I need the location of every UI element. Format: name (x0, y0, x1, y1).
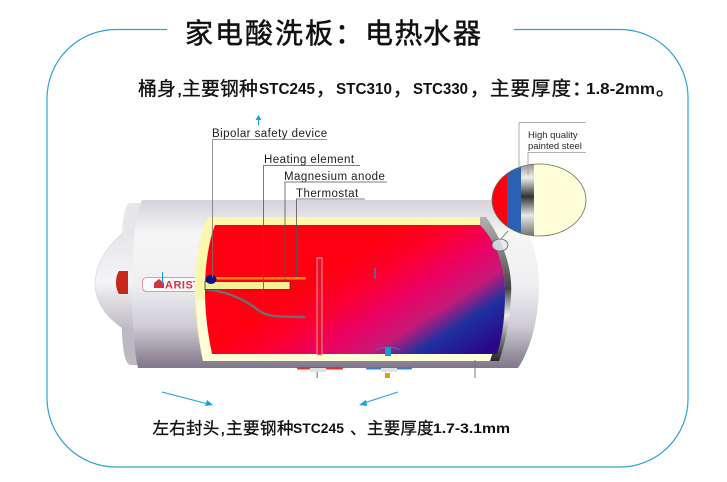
label: Thermostat (296, 188, 365, 277)
label: Magnesium anode (284, 171, 387, 282)
heater magnesium anode (205, 282, 290, 290)
heater dome end cap (95, 234, 122, 328)
caption: end heads: 1.7-3.1mm (433, 420, 510, 436)
heater heating element (205, 289, 305, 317)
title: 家电酸洗板：电热水器 (185, 18, 481, 49)
label: Bipolar safety device (212, 128, 328, 278)
label: Heating element (264, 154, 360, 312)
heater flange (121, 203, 140, 365)
caption: end heads (152, 419, 510, 438)
magnifier: steel layers (490, 160, 590, 251)
label: Heating element: Heating element (264, 154, 355, 166)
heater logo: ARIST (165, 280, 200, 292)
heater logo (142, 278, 200, 292)
heater safety device (206, 275, 216, 284)
caption: end heads: 、 (350, 420, 366, 438)
subtitle: barrel body (138, 78, 675, 100)
heater thermostat rod (211, 277, 306, 280)
caption: end heads: 左右封头,主要钢种 (152, 419, 294, 438)
caption: end heads: STC245 (293, 420, 344, 436)
water heater illustration (95, 200, 539, 378)
subtitle: barrel body: ， (316, 78, 335, 99)
subtitle: barrel body: STC330 (413, 81, 468, 98)
heater thermostat tube (317, 258, 322, 355)
subtitle: barrel body: ， (393, 78, 412, 99)
label: High quality painted steel: painted steel (528, 141, 582, 152)
small blue tick marks (162, 268, 375, 283)
arrow: to right head (359, 392, 398, 406)
subtitle: barrel body: 桶身,主要钢种 (138, 78, 258, 99)
subtitle: barrel body: STC310 (336, 81, 392, 98)
label: Magnesium anode: Magnesium anode (284, 171, 385, 183)
heater steel ring (480, 217, 511, 361)
label: High quality painted steel (519, 122, 586, 175)
subtitle: barrel body: 。 (656, 78, 675, 99)
subtitle: barrel body: ， (470, 78, 489, 99)
label: Thermostat: Thermostat (296, 188, 359, 200)
caption: end heads: 主要厚度 (367, 419, 434, 438)
heater red knob (116, 271, 128, 294)
label: Bipolar safety device: Bipolar safety device (212, 128, 328, 140)
heater cream insulation (195, 217, 497, 361)
heater cold water inlet (376, 347, 400, 356)
heater hot water tank (205, 225, 505, 354)
heater main body (132, 200, 539, 368)
label: High quality painted steel: High quality (528, 130, 578, 141)
heater bottom connectors (297, 360, 476, 378)
subtitle: barrel body: 主要厚度： (490, 78, 592, 100)
icon: small up arrow (256, 115, 262, 125)
subtitle: barrel body: STC245 (259, 81, 315, 98)
arrow: to left head (162, 392, 213, 406)
subtitle: barrel body: 1.8-2mm (586, 81, 655, 98)
